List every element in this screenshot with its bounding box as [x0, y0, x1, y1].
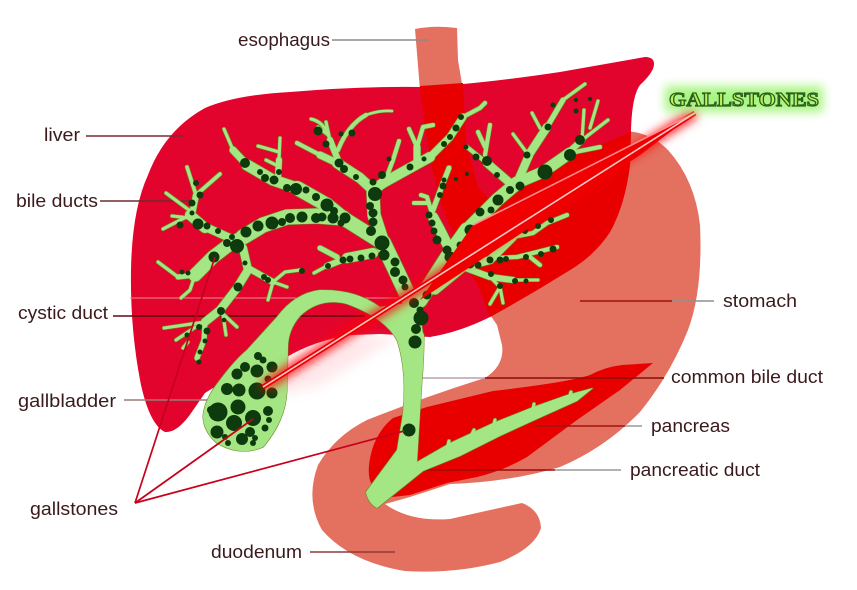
label: common bile duct: common bile duct — [671, 367, 823, 387]
leader lines — [86, 40, 714, 552]
label: esophagus: esophagus — [238, 30, 330, 50]
label: stomach: stomach — [723, 291, 797, 311]
esophagus — [415, 27, 463, 90]
pink glow beside pointer — [280, 335, 400, 395]
gallbladder stones — [207, 352, 278, 446]
gallbladder and cystic duct — [203, 290, 593, 508]
GALLSTONES label: GALLSTONES — [669, 89, 819, 111]
label: gallstones: gallstones — [30, 499, 118, 519]
bile duct tree — [158, 84, 608, 508]
pointer beam from GALLSTONES label to stones — [263, 113, 695, 387]
label: pancreatic duct: pancreatic duct — [630, 460, 760, 480]
label: liver: liver — [44, 125, 80, 145]
right lobe ducts — [420, 230, 467, 300]
label: bile ducts: bile ducts — [16, 191, 98, 211]
label: pancreas: pancreas — [651, 416, 730, 436]
ducts — [158, 84, 608, 445]
esophagus and stomach overlap on liver — [420, 83, 631, 317]
label: gallbladder: gallbladder — [18, 391, 116, 411]
liver — [131, 57, 654, 432]
pancreatic duct barbs — [448, 392, 571, 445]
stomach and duodenum — [312, 131, 700, 572]
gallstones inside ducts — [177, 98, 592, 436]
gallstones pointer lines — [135, 257, 404, 503]
pancreas — [369, 363, 653, 497]
label: cystic duct: cystic duct — [18, 303, 108, 323]
label: duodenum: duodenum — [211, 542, 302, 562]
